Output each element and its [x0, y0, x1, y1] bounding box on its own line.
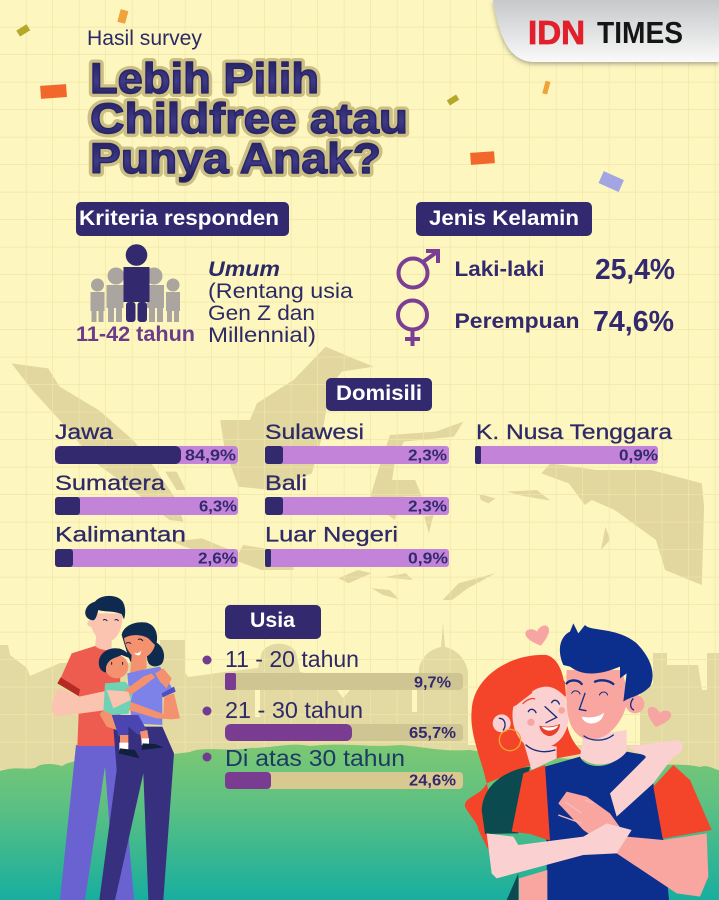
man's trousers: [60, 745, 134, 900]
logo: IDN Times: TIMES: [597, 15, 683, 50]
title: Punya Anak?: [90, 135, 381, 183]
title: Lebih Pilih: [90, 55, 319, 103]
panel: usia: [202, 605, 463, 790]
label: perempuan: Perempuan: [454, 309, 580, 333]
heading: kriteria responden: Kriteria responden: [79, 206, 279, 230]
panel: kriteria responden: [76, 202, 353, 347]
value: female share: 74,6%: [593, 306, 674, 338]
man's hair: [85, 596, 125, 620]
heart: [524, 625, 553, 649]
man's features: [567, 680, 613, 740]
bar: di atas 30: Di atas 30 tahun: [225, 745, 405, 771]
bar: jawa: Jawa: [55, 420, 113, 444]
bar: luar negeri: [265, 522, 449, 568]
heading: usia: [225, 605, 321, 639]
woman's lower arm: [487, 823, 632, 878]
bar: 21-30: 21 - 30 tahun: [225, 697, 363, 723]
woman's face: [124, 635, 155, 658]
woman's hair: [465, 655, 583, 850]
bar: sumatera: Sumatera: [55, 471, 165, 495]
bar: luar negeri: 0,9%: [408, 550, 448, 568]
heading: jenis kelamin: Jenis Kelamin: [429, 206, 579, 230]
bar: sumatera: 6,3%: [199, 498, 237, 516]
earring: [499, 729, 521, 751]
man's arm on chest: [558, 792, 708, 897]
faces: [103, 620, 143, 664]
man's head: [566, 670, 628, 739]
logo: IDN Times: IDN: [528, 14, 585, 51]
man's neck: [580, 730, 627, 765]
bar: sulawesi: [265, 420, 449, 464]
bar: di atas 30: 24,6%: [409, 772, 456, 790]
man's hand: [107, 690, 131, 708]
title: Punya Anak?: [90, 135, 381, 183]
bar: 21-30: [202, 697, 463, 742]
bar: 11-20: 9,7%: [414, 674, 451, 692]
man's arm: [52, 688, 130, 717]
man's sleeves: [512, 765, 550, 841]
child's shirt: [103, 682, 133, 715]
bar: kepulauan nusa tenggara: [475, 420, 672, 464]
bar: luar negeri: Luar Negeri: [265, 522, 398, 546]
woman's arms: [128, 693, 180, 719]
bar: bali: 2,3%: [408, 498, 447, 516]
heading: kriteria responden: [76, 202, 289, 236]
description: Umum: [208, 257, 280, 281]
bar: 21-30: 65,7%: [409, 725, 456, 742]
description: [208, 257, 353, 347]
title: [90, 55, 408, 183]
woman's shirt: [482, 767, 530, 900]
man's shirt: [545, 752, 669, 900]
man's ear: [626, 695, 644, 713]
title: Lebih Pilih: [90, 55, 319, 103]
woman's trousers: [99, 727, 174, 900]
child's arms: [125, 673, 155, 695]
description: Gen Z dan: [208, 301, 315, 325]
value: male share: 25,4%: [595, 254, 675, 286]
bar: kepulauan nusa tenggara: K. Nusa Tenggara: [476, 420, 672, 444]
bar: 11-20: 11 - 20 tahun: [225, 646, 359, 672]
panel: jenis kelamin: [398, 202, 675, 346]
icon: male symbol: [398, 251, 438, 288]
bar: kalimantan: 2,6%: [198, 550, 237, 568]
man's neck: [95, 632, 112, 651]
bar: bali: Bali: [265, 471, 307, 495]
label: laki-laki: Laki-laki: [454, 257, 544, 281]
bar: jawa: 84,9%: [185, 448, 236, 464]
man's head: [90, 613, 123, 642]
woman's features: [499, 700, 559, 752]
woman's ear: [493, 714, 511, 732]
woman's face: [512, 687, 568, 748]
description: (Rentang usia: [208, 279, 353, 303]
title: Childfree atau: [90, 95, 408, 143]
child's hair: [99, 648, 130, 673]
heading: jenis kelamin: [416, 202, 592, 236]
icon: group of people: [90, 244, 180, 322]
woman's arm over shoulder: [610, 740, 683, 817]
bar: jawa: [55, 420, 238, 464]
bar: di atas 30: [202, 745, 463, 790]
heart: [644, 706, 672, 730]
woman's hair back: [122, 622, 164, 668]
bar: bali: [265, 471, 449, 516]
illustration: family: [52, 596, 180, 900]
bar: 11-20: [202, 646, 463, 692]
icon: female symbol: [398, 300, 427, 346]
panel: domisili: [55, 378, 672, 568]
man's shirt: [58, 646, 121, 746]
bar: sumatera: [55, 471, 238, 516]
man's hair: [560, 623, 653, 702]
heading: usia: Usia: [250, 608, 296, 632]
ground: green hedge: [0, 745, 719, 900]
description: Millennial): [208, 323, 316, 347]
bar: kepulauan nusa tenggara: 0,9%: [619, 448, 658, 464]
illustration: couple: [465, 623, 712, 900]
logo: IDN Times: [493, 0, 719, 62]
subtitle: Hasil survey: [87, 27, 202, 50]
age range: 11-42 tahun: [76, 322, 195, 346]
heading: domisili: [326, 378, 432, 411]
skyline silhouette: [0, 623, 719, 780]
bar: kalimantan: [55, 522, 238, 568]
woman's shirt: [127, 667, 174, 725]
child's shorts: [112, 715, 147, 737]
map: Indonesia silhouette: [11, 347, 704, 600]
heading: domisili: Domisili: [336, 381, 422, 405]
child's head: [105, 655, 128, 678]
confetti: [16, 9, 624, 192]
child's legs and shoes: [120, 730, 149, 745]
title: Childfree atau: [90, 95, 408, 143]
woman's neck: [130, 655, 147, 675]
woman's neck: [523, 742, 557, 770]
woman's bangs: [513, 673, 566, 707]
bar: sulawesi: Sulawesi: [265, 420, 364, 444]
bar: kalimantan: Kalimantan: [55, 522, 186, 546]
bar: sulawesi: 2,3%: [408, 448, 447, 464]
